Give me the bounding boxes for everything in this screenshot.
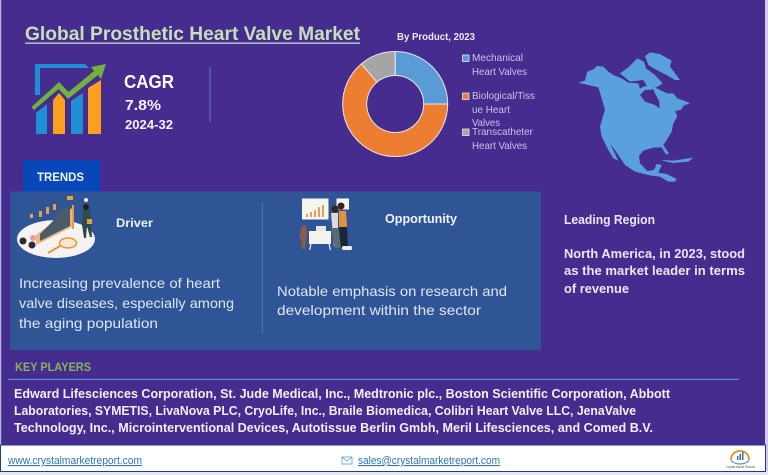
trends tab: TRENDS [37, 170, 84, 184]
panel: trends [10, 192, 541, 350]
opportunity text: development within the sector [277, 302, 481, 318]
logo: Crystal Market Reports [726, 465, 755, 469]
icon: driver illustration [17, 196, 95, 258]
CAGR block: 7.8% [125, 97, 161, 114]
opportunity text [277, 283, 507, 318]
chart heading: By Product, 2023 [397, 32, 475, 43]
legend: transcatheter [462, 126, 533, 152]
CAGR block [124, 72, 174, 132]
website link: www.crystalmarketreport.com [7, 455, 142, 467]
legend: biological: Biological/Tiss [472, 90, 535, 102]
logo [726, 451, 755, 469]
legend: mechanical [462, 52, 527, 78]
leading region: of revenue [564, 282, 629, 296]
legend: transcatheter: Heart Valves [472, 140, 527, 152]
email link: sales@crystalmarketreport.com [358, 455, 500, 467]
opportunity heading: Opportunity [385, 212, 457, 226]
footer [0, 445, 768, 475]
chart legend [462, 52, 535, 152]
slice: transcatheter [361, 52, 395, 82]
leading region: Leading Region [564, 213, 655, 227]
key players list [14, 387, 671, 435]
legend: biological [462, 90, 535, 129]
leading region: as the market leader in terms [564, 264, 745, 278]
legend: mechanical: Heart Valves [472, 66, 527, 78]
slice: biological [343, 64, 448, 157]
opportunity text: Notable emphasis on research and [277, 283, 507, 299]
trends tab [23, 160, 100, 192]
key players heading: KEY PLAYERS [15, 360, 91, 374]
legend: mechanical: Mechanical [472, 52, 523, 64]
key players list: Technology, Inc., Microinterventional Devices, Autotissue Berlin Gmbh, Meril Lifesciences, and Comed B.V. [14, 421, 653, 435]
leading region [564, 213, 745, 296]
title: Global Prosthetic Heart Valve Market [25, 23, 360, 45]
key players list: Edward Lifesciences Corporation, St. Jude Medical, Inc., Medtronic plc., Boston Scientific Corporation, Abbott [14, 387, 671, 401]
CAGR block: CAGR [124, 72, 174, 92]
driver heading: Driver [116, 216, 153, 230]
driver text: the aging population [19, 315, 158, 331]
icon: envelope [342, 457, 352, 464]
driver text [19, 275, 234, 331]
legend: biological: Valves [472, 117, 500, 129]
icon: opportunity illustration [300, 198, 352, 250]
map: North America [578, 52, 693, 182]
driver text: valve diseases, especially among [19, 295, 234, 311]
legend: transcatheter: Transcatheter [472, 126, 533, 138]
CAGR block: 2024-32 [125, 118, 173, 132]
donut chart [343, 52, 448, 157]
driver text: Increasing prevalence of heart [19, 275, 220, 291]
slice: mechanical [395, 52, 448, 104]
icon: growth chart [32, 64, 106, 134]
leading region: North America, in 2023, stood [564, 247, 745, 261]
legend: biological: ue Heart [472, 104, 510, 116]
key players list: Laboratories, SYMETIS, LivaNova PLC, CryoLife, Inc., Braile Biomedica, Colibri Heart Valve LLC, JenaValve [14, 404, 636, 418]
